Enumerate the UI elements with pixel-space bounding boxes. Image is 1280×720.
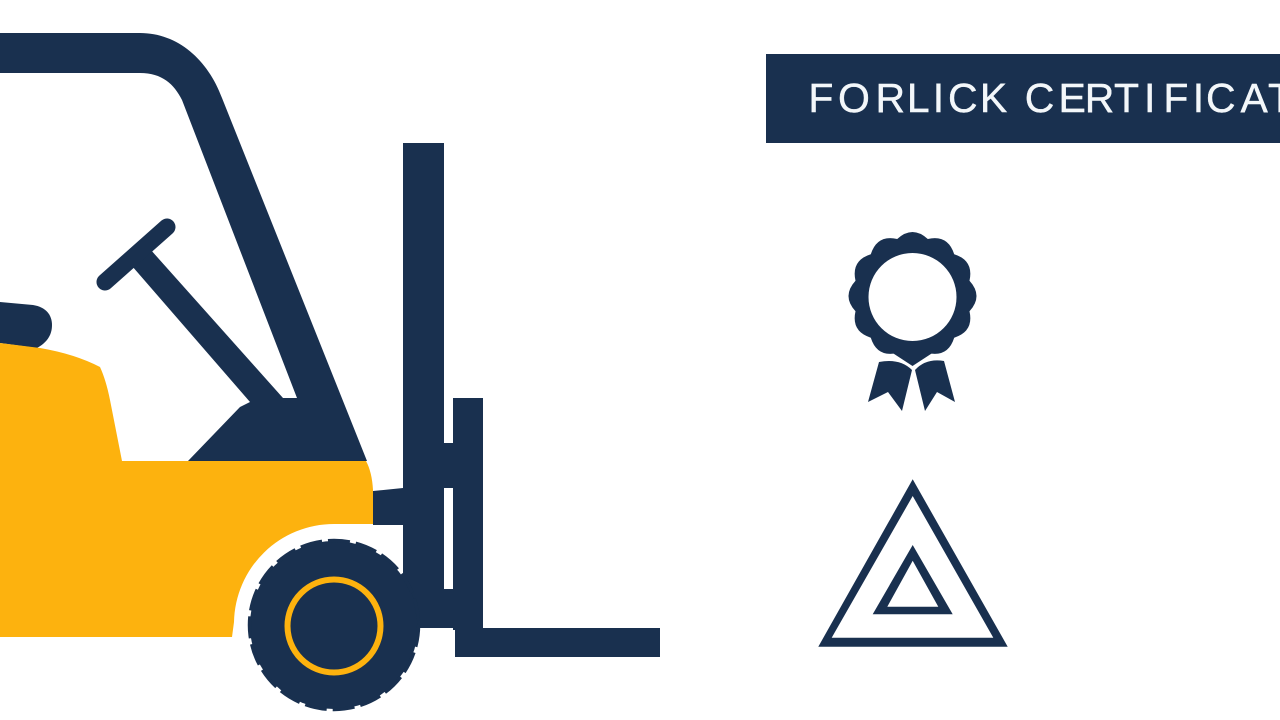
icon: warning triangle (818, 479, 1008, 647)
seat top (0, 302, 52, 348)
forklift illustration (0, 33, 660, 710)
cab roof, pillar and steering column (0, 33, 367, 461)
heading banner (766, 54, 1280, 143)
steering wheel (105, 227, 167, 282)
mast (403, 143, 444, 628)
fork (455, 628, 660, 657)
mast carriage (453, 398, 483, 630)
icon: award rosette (848, 232, 976, 411)
yellow body (0, 343, 373, 637)
mast cross bars (373, 443, 453, 628)
wheel (250, 540, 418, 710)
